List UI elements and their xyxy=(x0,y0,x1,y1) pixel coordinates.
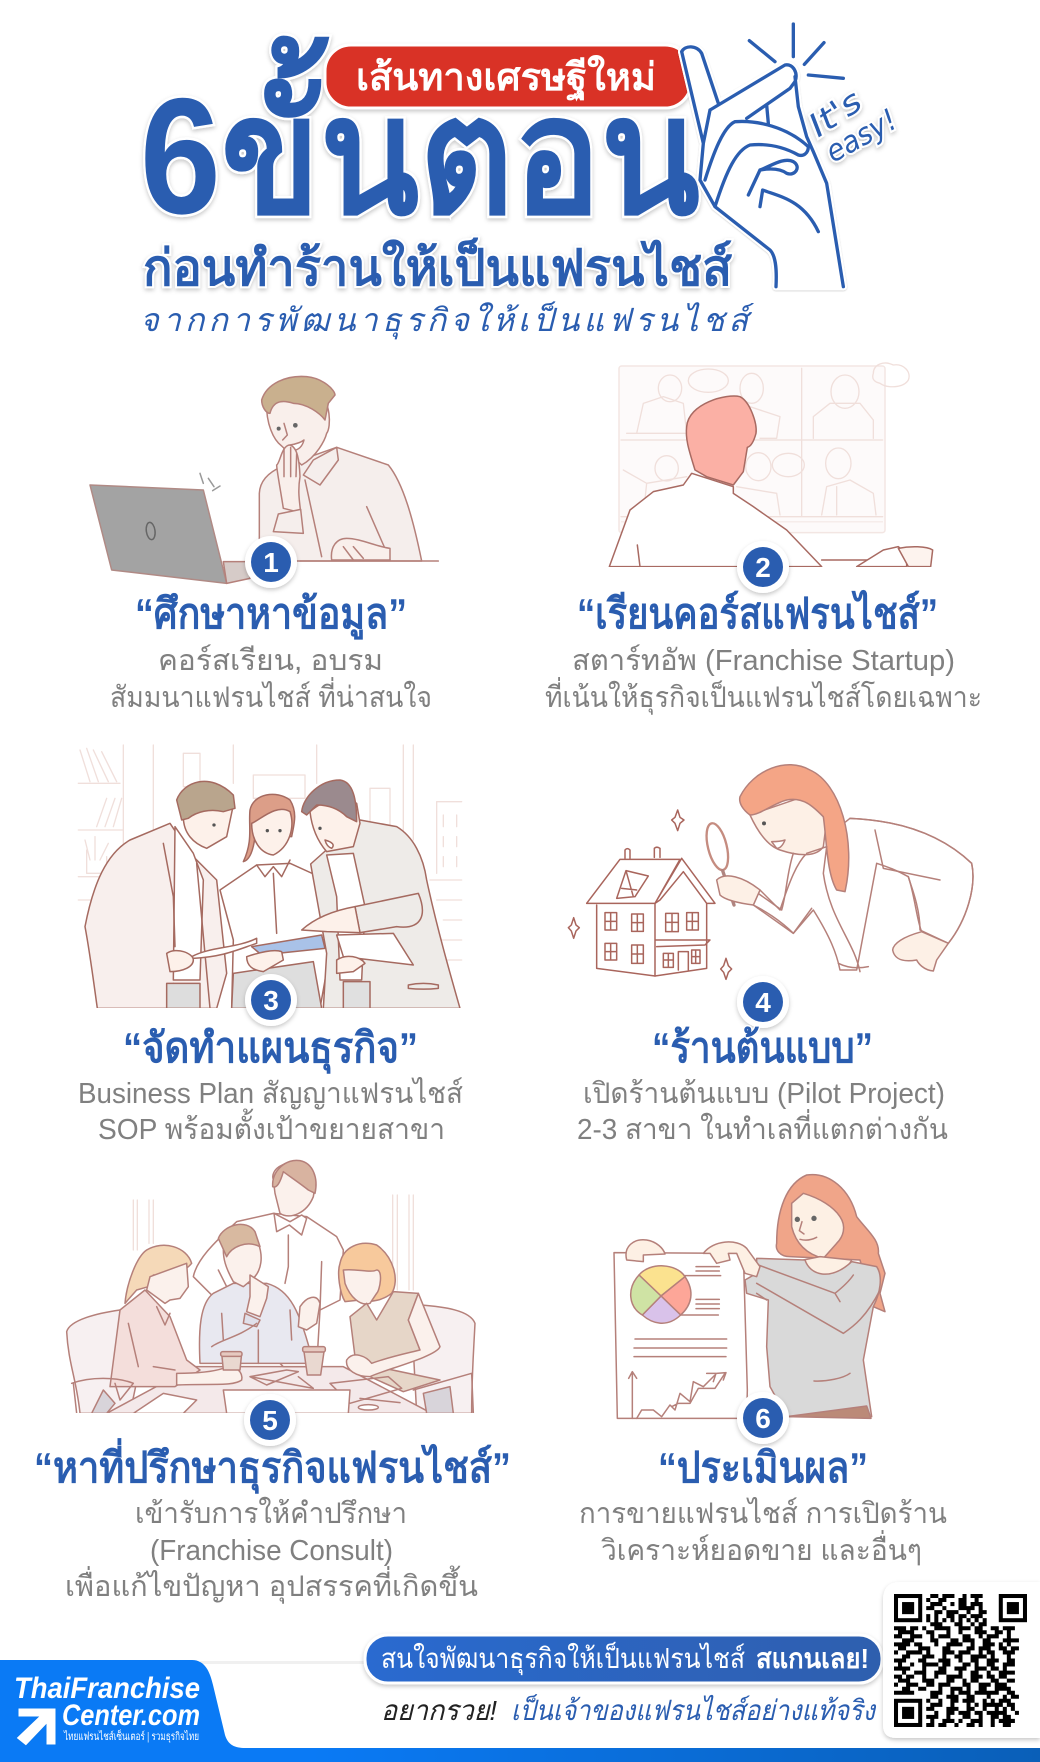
body 1 xyxy=(110,644,432,714)
number badge 5: 5 xyxy=(262,1405,278,1436)
footer background bar xyxy=(0,1661,1040,1762)
panel: step 3 xyxy=(70,745,480,1146)
body 2: สตาร์ทอัพ (Franchise Startup) xyxy=(572,644,955,677)
heading 6: “ประเมินผล” xyxy=(658,1444,868,1491)
footer xyxy=(0,1582,1040,1762)
number badge 6 xyxy=(737,1392,789,1444)
body 6: การขายแฟรนไชส์ การเปิดร้าน xyxy=(579,1496,947,1530)
body 4 xyxy=(577,1078,948,1146)
text: It's easy: It's xyxy=(801,82,869,145)
panel: step 1 xyxy=(90,376,438,714)
tagline xyxy=(381,1694,877,1726)
body 4: เปิดร้านต้นแบบ (Pilot Project) xyxy=(583,1078,945,1110)
body 6: วิเคราะห์ยอดขาย และอื่นๆ xyxy=(601,1530,922,1567)
icon: arrow xyxy=(16,1708,56,1746)
logo: ThaiFranchiseCenter.com xyxy=(0,1660,245,1762)
heading 2: “เรียนคอร์สแฟรนไชส์” xyxy=(577,589,938,637)
body 5: เพื่อแก้ไขปัญหา อุปสรรคที่เกิดขึ้น xyxy=(65,1565,478,1604)
title line: before franchising: ก่อนทำร้านให้เป็นแฟรนไชส์ xyxy=(143,237,732,296)
illustration: woman inspecting house xyxy=(568,765,973,979)
heading 4: “ร้านต้นแบบ” xyxy=(652,1024,873,1071)
call to action pill xyxy=(365,1635,882,1683)
title line: 6 steps: 6ขั้นตอน xyxy=(140,35,700,248)
body 3: Business Plan สัญญาแฟรนไชส์ xyxy=(78,1076,463,1110)
illustration: man with laptop xyxy=(90,376,438,583)
heading 3: “จัดทำแผนธุรกิจ” xyxy=(123,1024,418,1074)
logo: ThaiFranchiseCenter.com: ไทยแฟรนไชส์เซ็นเตอร์ | รวมธุรกิจไทย xyxy=(63,1729,199,1743)
illustration: business team xyxy=(78,745,462,1008)
body 5: เข้ารับการให้คำปรึกษา xyxy=(135,1496,407,1530)
body 3 xyxy=(78,1076,463,1146)
logo: ThaiFranchiseCenter.com: ThaiFranchise xyxy=(14,1672,200,1705)
illustration: woman holding report xyxy=(614,1175,885,1418)
number badge 5 xyxy=(244,1394,296,1446)
red pill subtitle xyxy=(325,45,691,108)
number badge 4 xyxy=(737,976,789,1028)
body 2 xyxy=(545,644,982,715)
number badge 3: 3 xyxy=(263,985,279,1016)
number badge 1: 1 xyxy=(263,547,279,578)
body 6 xyxy=(579,1496,947,1567)
heading 1: “ศึกษาหาข้อมูล” xyxy=(135,590,407,640)
body 1: สัมมนาแฟรนไชส์ ที่น่าสนใจ xyxy=(110,677,432,714)
panel: step 4 xyxy=(568,765,973,1146)
heading 5: “หาที่ปรึกษาธุรกิจแฟรนไชส์” xyxy=(34,1438,511,1494)
title line: handwritten subtitle: จากการพัฒนาธุรกิจให้เป็นแฟรนไชส์ xyxy=(140,301,754,340)
body 5: (Franchise Consult) xyxy=(150,1535,393,1567)
number badge 2 xyxy=(737,541,789,593)
body 1: คอร์สเรียน, อบรม xyxy=(158,644,383,677)
title xyxy=(140,24,903,340)
number badge 3 xyxy=(245,974,297,1026)
text: It's easy: easy! xyxy=(820,103,903,170)
text: It's easy xyxy=(801,82,903,170)
illustration: consulting meeting xyxy=(67,1160,475,1413)
body 2: ที่เน้นให้ธุรกิจเป็นแฟรนไชส์โดยเฉพาะ xyxy=(545,677,982,715)
panel: step 2 xyxy=(545,363,982,715)
number badge 4: 4 xyxy=(755,987,771,1018)
illustration: online class xyxy=(609,363,933,567)
red pill subtitle: เส้นทางเศรษฐีใหม่ xyxy=(356,55,656,102)
number badge 6: 6 xyxy=(755,1403,771,1434)
tagline: อยากรวย! xyxy=(381,1695,497,1726)
number badge 2: 2 xyxy=(755,552,771,583)
body 5 xyxy=(65,1496,478,1604)
body 4: 2-3 สาขา ในทำเลที่แตกต่างกัน xyxy=(577,1109,948,1146)
panel: step 6 xyxy=(579,1175,947,1567)
number badge 1 xyxy=(245,536,297,588)
panel: step 5 xyxy=(34,1160,511,1604)
body 3: SOP พร้อมตั้งเป้าขยายสาขา xyxy=(98,1108,445,1146)
logo: ThaiFranchiseCenter.com: Center.com xyxy=(62,1699,200,1732)
call to action pill: สแกนเลย! xyxy=(756,1643,869,1674)
tagline: เป็นเจ้าของแฟรนไชส์อย่างแท้จริง xyxy=(511,1694,877,1726)
call to action pill: สนใจพัฒนาธุรกิจให้เป็นแฟรนไชส์ xyxy=(381,1641,745,1676)
QR code card xyxy=(883,1582,1040,1738)
icon: finger snap hand xyxy=(682,24,843,287)
